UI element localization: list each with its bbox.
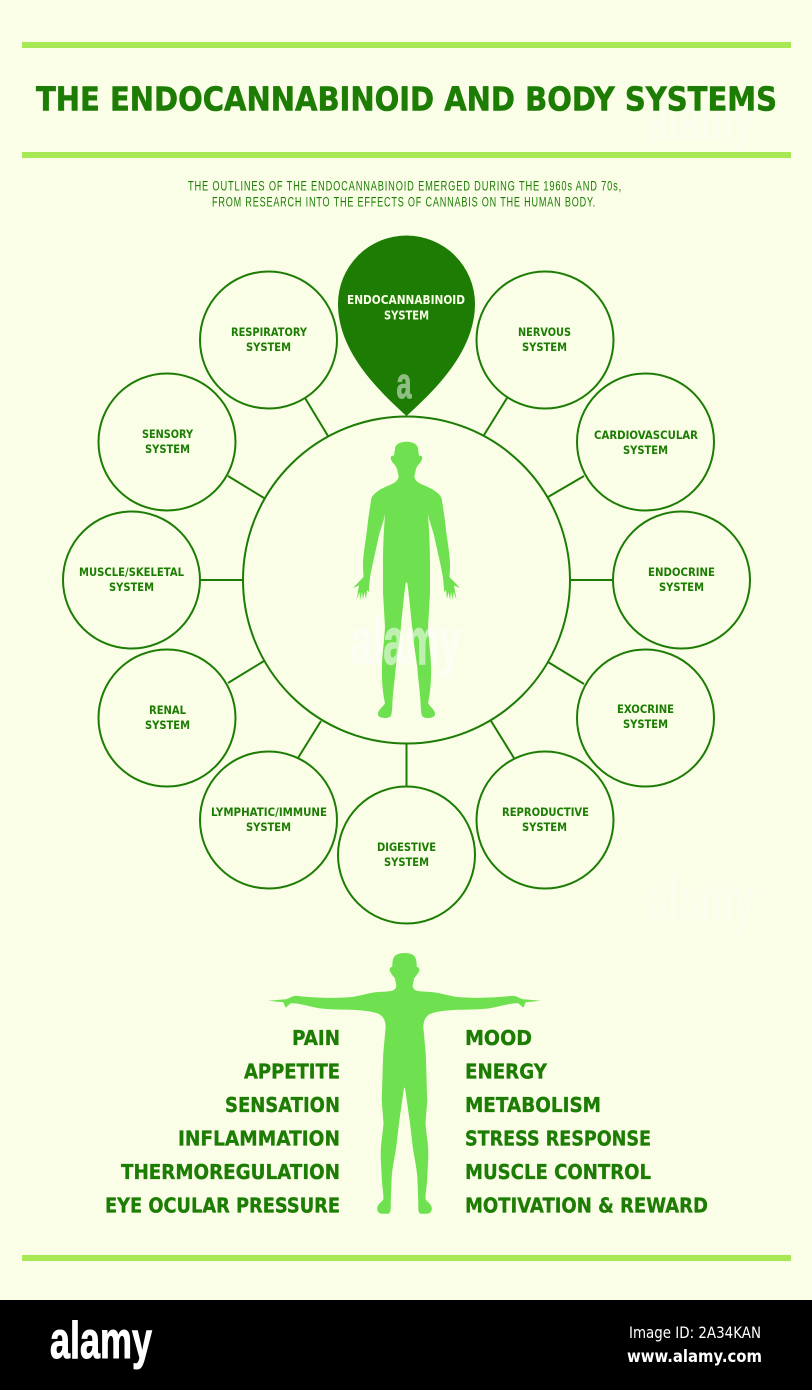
system: cardiovascular: CARDIOVASCULAR — [594, 428, 698, 442]
effects list: left column: EYE OCULAR PRESSURE — [105, 1194, 340, 1218]
system: muscle/skeletal — [63, 512, 200, 648]
system: sensory — [98, 374, 236, 510]
system: exocrine — [577, 650, 714, 786]
footer bar — [0, 1300, 812, 1390]
system: endocrine: ENDOCRINE — [648, 565, 715, 579]
effects list: right column: MUSCLE CONTROL — [465, 1160, 651, 1184]
effects list: right column: ENERGY — [465, 1060, 548, 1084]
system: exocrine: SYSTEM — [623, 717, 668, 731]
effects list: left column: SENSATION — [225, 1093, 340, 1117]
system: lymphatic/immune: LYMPHATIC/IMMUNE — [211, 805, 327, 819]
top rule — [22, 42, 791, 48]
system: muscle/skeletal: MUSCLE/SKELETAL — [79, 565, 185, 579]
system: nervous: NERVOUS — [518, 325, 571, 339]
endocannabinoid drop marker: a — [396, 359, 412, 408]
footer logo: alamy — [50, 1312, 152, 1370]
icon: human body with arms outstretched — [268, 953, 541, 1214]
system: reproductive — [476, 752, 614, 888]
system: nervous: SYSTEM — [522, 340, 567, 354]
system: renal: SYSTEM — [145, 718, 190, 732]
effects list: left column: PAIN — [292, 1026, 340, 1050]
system: digestive — [338, 786, 475, 924]
system: respiratory — [200, 272, 337, 408]
footer image id: Image ID: 2A34KAN — [629, 1323, 761, 1342]
system: cardiovascular — [577, 374, 714, 510]
intro text: THE OUTLINES OF THE ENDOCANNABINOID EMERGED DURING THE 1960s AND 70s, — [188, 178, 622, 194]
effects list: right column: MOOD — [465, 1026, 532, 1050]
effects list: right column: MOTIVATION & REWARD — [465, 1194, 708, 1218]
connectors between hub and system circles — [200, 398, 612, 786]
system: respiratory: SYSTEM — [246, 340, 291, 354]
effects list: right column: STRESS RESPONSE — [465, 1127, 651, 1151]
system: lymphatic/immune: SYSTEM — [246, 820, 291, 834]
system: exocrine: EXOCRINE — [617, 702, 674, 716]
title rule — [22, 152, 791, 158]
effects list: left column — [105, 1026, 340, 1218]
system: renal: RENAL — [149, 703, 187, 717]
effects list: left column: APPETITE — [244, 1060, 340, 1084]
system: cardiovascular: SYSTEM — [623, 443, 668, 457]
effects list: left column: INFLAMMATION — [178, 1127, 340, 1151]
footer url: www.alamy.com — [627, 1347, 762, 1367]
system: reproductive: SYSTEM — [522, 820, 567, 834]
bottom rule — [22, 1255, 791, 1261]
intro text — [188, 178, 622, 210]
system: sensory: SENSORY — [142, 427, 194, 441]
system: digestive: DIGESTIVE — [377, 840, 436, 854]
watermark over body: alamy — [351, 604, 461, 678]
system: sensory: SYSTEM — [145, 442, 190, 456]
central hub circle with body — [243, 416, 570, 744]
system: reproductive: REPRODUCTIVE — [502, 805, 589, 819]
intro text: FROM RESEARCH INTO THE EFFECTS OF CANNABIS ON THE HUMAN BODY. — [212, 194, 596, 210]
effects list: right column: METABOLISM — [465, 1093, 601, 1117]
endocannabinoid drop marker — [338, 236, 475, 416]
system: nervous — [476, 272, 614, 408]
system: digestive: SYSTEM — [384, 855, 429, 869]
system: respiratory: RESPIRATORY — [231, 325, 308, 339]
system: lymphatic/immune — [200, 752, 337, 888]
icon: standing human body — [353, 442, 460, 718]
endocannabinoid drop marker: SYSTEM — [384, 308, 429, 322]
effects list: right column — [465, 1026, 708, 1218]
system: muscle/skeletal: SYSTEM — [109, 580, 154, 594]
effects list: left column: THERMOREGULATION — [121, 1160, 340, 1184]
system: endocrine — [613, 512, 750, 648]
endocannabinoid drop marker: ENDOCANNABINOID — [347, 293, 465, 307]
system: endocrine: SYSTEM — [659, 580, 704, 594]
system: renal — [98, 650, 236, 786]
faint background watermarks — [647, 81, 755, 935]
